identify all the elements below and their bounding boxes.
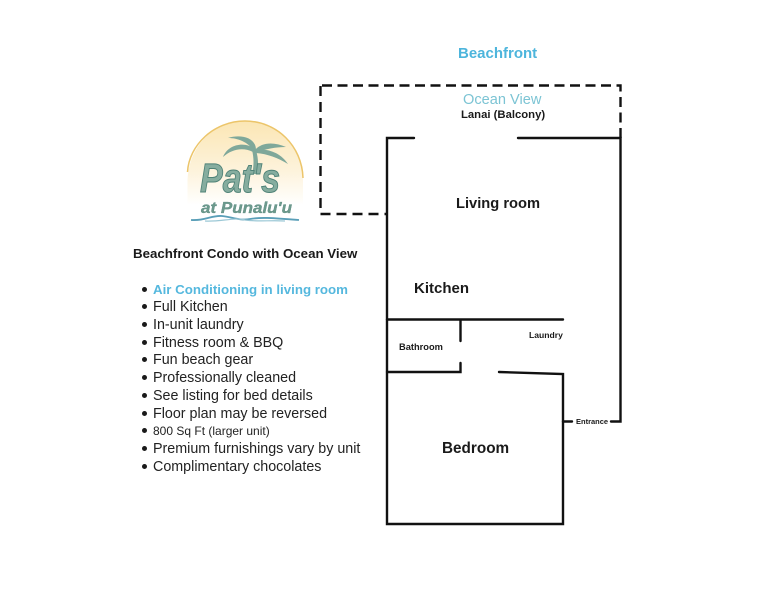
sun arc [188,121,303,205]
item: Full Kitchen: Full Kitchen [153,299,228,315]
logo: Pat's at Punalu'u [186,120,304,222]
label: Laundry: Laundry [529,330,563,340]
logo: Pat's at Punalu'u: at Punalu'u [201,200,292,217]
label: Bedroom: Bedroom [442,440,509,457]
item: Premium furnishings: Premium furnishings vary by unit [153,441,360,457]
heading: Beachfront: Beachfront [458,45,537,62]
item: In-unit laundry: In-unit laundry [153,317,244,333]
heading: Beachfront Condo with Ocean View: Beachfront Condo with Ocean View [133,246,357,261]
label: Bathroom: Bathroom [399,342,443,352]
label: Lanai (Balcony): Lanai (Balcony) [461,109,545,121]
logo script text: Pat's [200,155,280,201]
item: Fun beach gear: Fun beach gear [153,352,253,368]
balcony dashed outline [320,86,620,214]
walls [387,138,620,524]
item: Air Conditioning: Air Conditioning in living room [153,282,348,297]
item: 800 Sq Ft: 800 Sq Ft (larger unit) [153,424,270,438]
label: Ocean View: Ocean View [463,92,541,108]
label: Entrance: Entrance [576,417,608,426]
palm tree [223,136,288,174]
item: Professionally cleaned: Professionally cleaned [153,370,296,386]
label: Kitchen: Kitchen [414,280,469,297]
item: Floor plan: Floor plan may be reversed [153,406,327,422]
label: Living room: Living room [456,196,540,212]
item: See listing: See listing for bed details [153,388,313,404]
item: Fitness room: Fitness room & BBQ [153,335,283,351]
waves [191,216,299,220]
item: Complimentary chocolates: Complimentary chocolates [153,459,321,475]
